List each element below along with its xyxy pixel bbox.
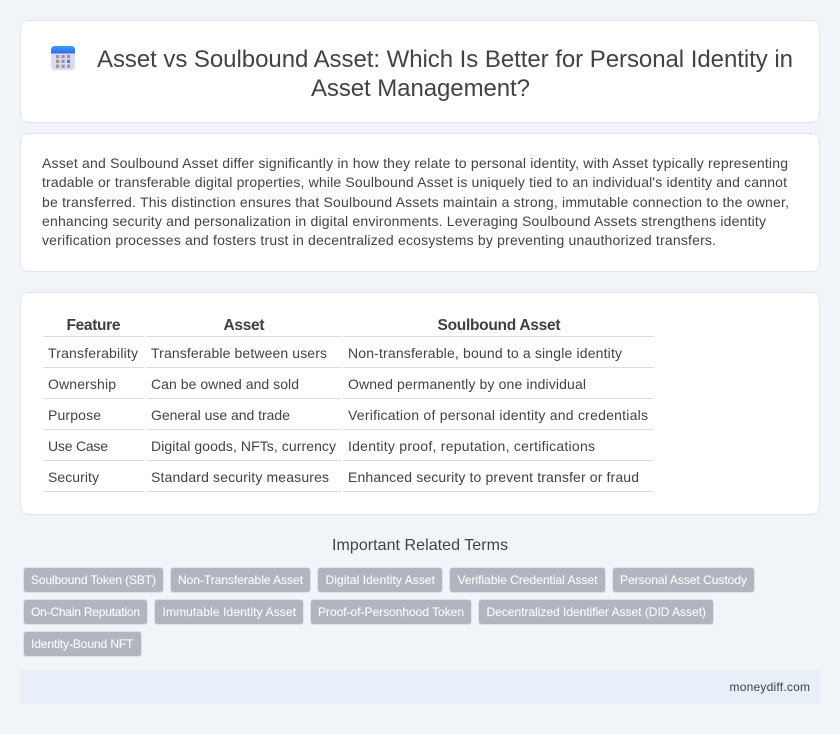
tag list: related terms: Digital Identity Asset (326, 573, 436, 587)
row: ownership: Owned permanently by one individual (348, 376, 586, 392)
row: purpose: Purpose (48, 407, 101, 423)
row: transferability: Transferability (48, 345, 138, 361)
table header: Feature (66, 317, 121, 334)
row: purpose: General use and trade (151, 407, 290, 423)
tag list: related terms: Non-Transferable Asset (178, 573, 304, 587)
row: ownership: Can be owned and sold (151, 376, 299, 392)
row: transferability: Transferable between users (151, 345, 327, 361)
tag list: related terms: Proof-of-Personhood Token (318, 605, 464, 619)
panel: intro text: verification processes and fosters trust in decentralized ecosystems by preventing unauthorized transfers. (42, 232, 716, 248)
panel: intro text (20, 134, 820, 272)
panel: intro text: tradable or transferable digital properties, while Soulbound Asset is uniquely tied to an individual's identity and cannot (42, 174, 787, 190)
tag list: related terms: On-Chain Reputation (31, 605, 140, 619)
footer: moneydiff.com (730, 680, 810, 694)
row: purpose: Verification of personal identity and credentials (348, 407, 648, 423)
table header (43, 317, 654, 337)
tag list: related terms: Verifiable Credential Asset (458, 573, 598, 587)
title (97, 46, 793, 102)
title: Asset vs Soulbound Asset: Which Is Better for Personal Identity in (97, 46, 793, 73)
panel: intro text: be transferred. This distinction ensures that Soulbound Assets maintain a strong, immutable connection to the owner, (42, 194, 789, 210)
panel: comparison table (20, 292, 820, 514)
tag list: related terms: Immutable Identity Asset (162, 605, 297, 619)
tag list: related terms: Decentralized Identifier Asset (DID Asset) (486, 605, 706, 619)
row: security: Enhanced security to prevent transfer or fraud (348, 469, 639, 485)
row: security: Standard security measures (151, 469, 329, 485)
panel: intro text: enhancing security and personalization in digital environments. Leveraging Soulbound Assets strengthens identity (42, 213, 766, 229)
tag list: related terms: Identity-Bound NFT (31, 637, 134, 651)
row: purpose (43, 407, 654, 430)
row: use case: Digital goods, NFTs, currency (151, 438, 336, 454)
row: security: Security (48, 469, 99, 485)
row: use case (43, 438, 654, 461)
title: Asset Management? (311, 75, 530, 102)
row: transferability (43, 345, 654, 368)
row: ownership (43, 376, 654, 399)
panel: header (20, 20, 820, 122)
heading: important related terms: Important Related Terms (332, 537, 508, 554)
icon: calendar (51, 46, 75, 70)
row: use case: Identity proof, reputation, certifications (348, 438, 595, 454)
tag list: related terms: Soulbound Token (SBT) (31, 573, 156, 587)
footer (20, 670, 820, 704)
row: transferability: Non-transferable, bound to a single identity (348, 345, 622, 361)
tag list: related terms: Personal Asset Custody (620, 573, 747, 587)
tag list: related terms (24, 568, 754, 656)
panel: intro text: Asset and Soulbound Asset differ significantly in how they relate to personal identity, with Asset typically representing (42, 155, 788, 171)
table header: Soulbound Asset (438, 317, 560, 334)
row: ownership: Ownership (48, 376, 116, 392)
table header: Asset (224, 317, 264, 334)
row: use case: Use Case (48, 438, 108, 454)
row: security (43, 469, 654, 492)
